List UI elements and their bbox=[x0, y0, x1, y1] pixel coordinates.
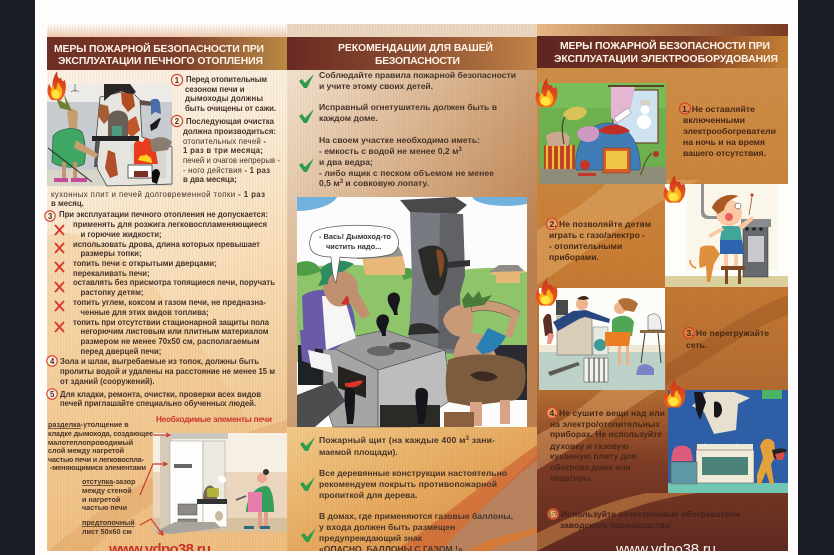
text block: items 1 and 2: сезоном печи и bbox=[185, 85, 245, 94]
text block: item 3 prohibitions: топить углем, коксом и газом печи, не предназна- bbox=[73, 298, 266, 307]
heading: electrical equipment bbox=[537, 36, 788, 68]
heading: recommendations bbox=[287, 37, 537, 70]
text block: items 4 and 5: Для кладки, ремонта, очистки, проверки всех видов bbox=[60, 390, 261, 399]
text block: items 1 and 2: кухонных плит и печей долговременной топки - 1 раз bbox=[51, 190, 265, 199]
text block: lower recommendations: В домах, где применяются газовые баллоны, bbox=[319, 511, 513, 521]
heading: electrical equipment: ЭКСПЛУАТАЦИИ ЭЛЕКТРООБОРУДОВАНИЯ bbox=[554, 54, 778, 65]
text block: items 1 and 2: в месяц. bbox=[51, 199, 84, 208]
icon: flame bbox=[47, 71, 66, 100]
badge: number 1: 1 bbox=[175, 76, 180, 85]
heading: stove heating: МЕРЫ ПОЖАРНОЙ БЕЗОПАСНОСТИ ПРИ bbox=[54, 42, 264, 55]
text block: rule 5: заводского производства! bbox=[560, 520, 672, 530]
text block: upper recommendations: каждом доме. bbox=[319, 113, 378, 123]
text block: lower recommendations bbox=[319, 435, 513, 554]
text block: item 3 prohibitions: При эксплуатации печного отопления не допускается: bbox=[59, 210, 268, 219]
badge: number 4: 4 bbox=[50, 357, 55, 366]
text block: items 4 and 5: печей приглашайте специально обученных людей. bbox=[60, 399, 256, 408]
text block: upper recommendations: 3 bbox=[340, 179, 344, 185]
text block: item 3 prohibitions: растопку детям; bbox=[80, 288, 143, 297]
text block: lower recommendations: маемой площади). bbox=[319, 447, 398, 457]
panel: stove heating safety bbox=[45, 24, 287, 555]
text block: upper recommendations: - емкость с водой не менее 0,2 м bbox=[319, 146, 458, 156]
badge: number 3: 3 bbox=[48, 212, 53, 221]
text block: lower recommendations: пропиткой для дерева. bbox=[319, 490, 417, 500]
text block: item 3 prohibitions: топить при отсутствии стационарной защиты пола bbox=[73, 318, 270, 327]
text block: rule 2: приборами. bbox=[549, 252, 599, 262]
illustration: stove diagram with woman bbox=[153, 433, 287, 534]
text block: items 1 and 2: печей и очагов непрерыв - bbox=[183, 156, 280, 165]
text block: lower recommendations: рекомендуем покрыть противопожарной bbox=[319, 479, 497, 489]
text block: lower recommendations: у входа должен быть размещен bbox=[319, 522, 455, 532]
badge: number 5: 5 bbox=[50, 390, 55, 399]
text block: item 3 prohibitions: применять для розжига легковоспламеняющиеся bbox=[73, 220, 267, 229]
speech bubble bbox=[310, 225, 398, 283]
text block: item 3 prohibitions: использовать дрова, длина которых превышает bbox=[73, 240, 260, 249]
badge: number 4 bbox=[47, 356, 57, 366]
man in wrap bbox=[443, 291, 526, 426]
badge: number 2 bbox=[171, 115, 183, 127]
text block: rule 4: на электро/отопительных bbox=[550, 419, 660, 429]
text block: rule 3: Не перегружайте bbox=[696, 328, 769, 338]
heading: electrical equipment: МЕРЫ ПОЖАРНОЙ БЕЗОПАСНОСТИ ПРИ bbox=[560, 39, 770, 52]
text block: rule 3: 3. bbox=[686, 328, 694, 338]
text block: lower recommendations: 3 bbox=[466, 436, 470, 442]
text block: items 4 and 5: пролиты водой и удалены на расстояние не менее 15 м bbox=[60, 367, 275, 376]
panel: recommendations bbox=[287, 24, 537, 554]
panel bottom margin bbox=[35, 551, 798, 555]
heading: stove heating bbox=[47, 37, 287, 70]
icons: lower checkmarks bbox=[300, 437, 316, 542]
text block: upper recommendations bbox=[319, 70, 516, 188]
heading: recommendations: РЕКОМЕНДАЦИИ ДЛЯ ВАШЕЙ bbox=[338, 41, 493, 54]
text block: rule 3: сеть. bbox=[686, 340, 707, 350]
text block: rule 5 bbox=[548, 508, 740, 530]
text block: item 3 prohibitions: ченные для этих видов топлива; bbox=[80, 308, 209, 317]
text block: rule 1 bbox=[680, 103, 776, 158]
annotation: stove element labels: частью печи и легковоспла- bbox=[48, 455, 145, 464]
text block: upper recommendations: и два ведра; bbox=[319, 157, 373, 167]
badge: number 5 bbox=[47, 389, 57, 399]
text block: rule 4: кухонную плиту для bbox=[550, 451, 636, 461]
text block: items 1 and 2: в два месяца; bbox=[183, 175, 237, 184]
annotation: stove element labels: и нагретой bbox=[82, 495, 120, 504]
badge: number 1 bbox=[171, 74, 183, 86]
text block: rule 1: включенными bbox=[683, 115, 745, 125]
annotation: stove element labels: -меняющимися элементами bbox=[50, 463, 146, 472]
text block: item 3 prohibitions: оставлять без присмотра топящиеся печи, поручать bbox=[73, 278, 275, 287]
text block: upper recommendations: 3 bbox=[458, 147, 462, 153]
speech bubble: чистить надо... bbox=[326, 242, 381, 251]
text block: items 4 and 5: Зола и шлак, выгребаемые из топок, должны быть bbox=[60, 357, 259, 366]
annotation: stove element labels: отступка-зазор bbox=[82, 477, 136, 486]
icons: upper checkmarks bbox=[299, 74, 314, 172]
text block: item 3 prohibitions: перед дверцей печи; bbox=[80, 347, 161, 356]
text block: item 3 prohibitions: перекаливать печи; bbox=[73, 269, 150, 278]
badge: number 3 bbox=[45, 211, 55, 221]
text block: items 4 and 5: от зданий (сооружений). bbox=[60, 377, 155, 386]
annotation: stove element labels: частью печи bbox=[82, 503, 127, 512]
text block: items 1 and 2: быть очищены от сажи. bbox=[185, 104, 276, 113]
illustration: heaters left on in room bbox=[539, 83, 666, 184]
annotation: stove element labels: между стеной bbox=[82, 486, 132, 495]
text block: rule 2: - отопительными bbox=[549, 241, 622, 251]
text block: item 3 prohibitions: и горючие жидкости; bbox=[80, 230, 162, 239]
text block: rule 2: играть с газо/электро - bbox=[549, 230, 645, 240]
annotation: stove element labels: предтопочный bbox=[82, 518, 135, 527]
text block: upper recommendations: 0,5 м bbox=[319, 178, 340, 188]
text block: rule 2: Не позволяйте детям bbox=[559, 219, 651, 229]
text block: lower recommendations: зани- bbox=[469, 435, 495, 445]
text block: lower recommendations: Все деревянные конструкции настоятельно bbox=[319, 468, 507, 478]
text block: upper recommendations: - либо ящик с песком объемом не менее bbox=[319, 168, 494, 178]
text block: rule 2: 2. bbox=[550, 219, 557, 229]
text block: item 3 prohibitions bbox=[45, 210, 275, 356]
text block: item 3 prohibitions: негорючим листовым или плитным материалом bbox=[80, 327, 269, 336]
text block: upper recommendations: и учите этому своих детей. bbox=[319, 81, 433, 91]
text block: rule 2 bbox=[546, 218, 651, 262]
text block: item 3 prohibitions: размером не менее 70х50 см, располагаемым bbox=[80, 337, 260, 346]
text block: items 1 and 2 bbox=[51, 74, 280, 208]
text block: rule 5: Используйте качественные обогреватели bbox=[561, 509, 740, 519]
text block: rule 4: квартиры. bbox=[550, 473, 593, 483]
text block: items 1 and 2: должна производиться: bbox=[183, 127, 276, 136]
text block: items 1 and 2: Перед отопительным bbox=[186, 75, 267, 84]
annotation: stove element labels bbox=[48, 420, 153, 536]
icons: red crosses bbox=[55, 225, 64, 332]
text block: rule 5: 5. bbox=[550, 509, 558, 519]
text block: upper recommendations: Исправный огнетушитель должен быть в bbox=[319, 102, 497, 112]
illustration: overloaded sockets quarrel bbox=[539, 288, 665, 390]
annotation: stove element labels: слой между нагретой bbox=[48, 446, 124, 455]
text block: items 1 and 2: отопительных печей - bbox=[183, 137, 266, 146]
text block: rule 4: духовку и газовую bbox=[550, 441, 629, 451]
heading: recommendations: БЕЗОПАСНОСТИ bbox=[375, 56, 460, 67]
text block: item 3 prohibitions: размеры топки; bbox=[80, 249, 142, 258]
text block: upper recommendations: На своем участке необходимо иметь: bbox=[319, 135, 480, 145]
illustration: boy with match at gas stove bbox=[665, 184, 788, 287]
illustration: laundry over kitchen stove bbox=[668, 390, 788, 493]
annotation: stove element labels: малотеплопроводимый bbox=[48, 438, 133, 447]
text block: items 1 and 2: - ного действия - 1 раз bbox=[183, 166, 270, 175]
text block: item 3 prohibitions: топить печи с открытыми дверцами; bbox=[73, 259, 217, 268]
badge: number 2: 2 bbox=[175, 117, 180, 126]
heading: stove heating: ЭКСПЛУАТАЦИИ ПЕЧНОГО ОТОПЛЕНИЯ bbox=[58, 56, 263, 67]
text block: rule 4: Не сушите вещи над или bbox=[559, 408, 665, 418]
text block: rule 4: приборах. Не используйте bbox=[550, 429, 662, 439]
text block: items 1 and 2: 1 раз в три месяца; bbox=[183, 146, 263, 155]
heading: necessary stove elements: Необходимые элементы печи bbox=[156, 414, 272, 424]
panel: electrical equipment safety bbox=[536, 24, 788, 555]
annotation: stove element labels: лист 50х60 см bbox=[82, 527, 132, 536]
text block: lower recommendations: Пожарный щит (на каждые 400 м bbox=[319, 435, 465, 445]
illustration: sooty chimney and villagers bbox=[297, 197, 527, 427]
text block: rule 4 bbox=[546, 408, 665, 483]
text block: rule 1: электрообогреватели bbox=[683, 126, 776, 136]
text block: rule 1: на ночь и на время bbox=[683, 137, 765, 147]
arrows: element pointers bbox=[140, 433, 170, 535]
icons: flames bbox=[536, 78, 685, 408]
text block: rule 1: вашего отсутствия. bbox=[683, 148, 766, 158]
text block: upper recommendations: Соблюдайте правила пожарной безопасности bbox=[319, 70, 516, 80]
text block: lower recommendations: «ОПАСНО, БАЛЛОНЫ С ГАЗОМ !». bbox=[319, 544, 465, 554]
text block: rule 3 bbox=[684, 328, 769, 350]
text block: lower recommendations: предупреждающий знак bbox=[319, 533, 423, 543]
text block: items 4 and 5 bbox=[47, 356, 275, 408]
annotation: stove element labels: разделка-утолщение в bbox=[48, 420, 129, 429]
text block: items 1 and 2: Последующая очистка bbox=[186, 117, 275, 126]
text block: rule 4: обогрева дома или bbox=[550, 462, 631, 472]
illustration: woman at burning stove bbox=[47, 84, 172, 186]
annotation: stove element labels: кладке дымохода, создающее bbox=[48, 429, 153, 438]
text block: rule 4: 4. bbox=[550, 408, 557, 418]
speech bubble: - Вась! Дымоход-то bbox=[319, 232, 391, 241]
text block: upper recommendations: и совковую лопату. bbox=[343, 178, 429, 188]
text block: items 1 and 2: дымоходы должны bbox=[185, 94, 263, 103]
text block: rule 1: 1. Не оставляйте bbox=[682, 104, 755, 114]
